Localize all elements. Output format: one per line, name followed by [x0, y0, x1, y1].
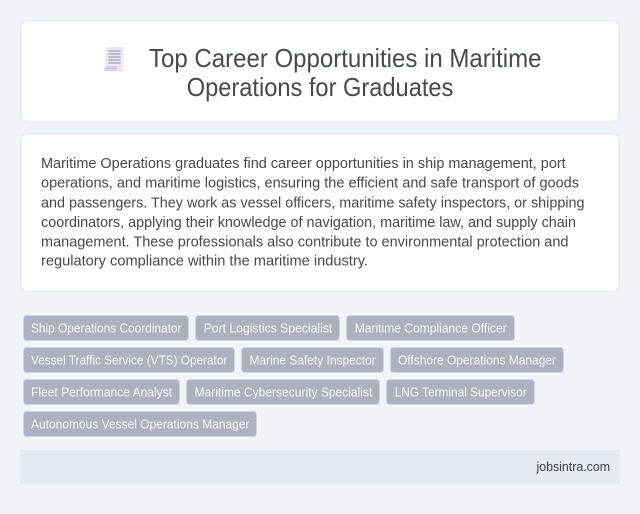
tag: Fleet Performance Analyst: [24, 380, 180, 404]
tag: Marine Safety Inspector: Marine Safety Inspector: [250, 352, 376, 368]
tag: LNG Terminal Supervisor: LNG Terminal Supervisor: [395, 384, 527, 400]
tag: Autonomous Vessel Operations Manager: [24, 412, 256, 436]
description text: management. These professionals also contribute to environmental protection and: [41, 233, 568, 250]
tag: Ship Operations Coordinator: [24, 316, 188, 340]
tag: Autonomous Vessel Operations Manager: Autonomous Vessel Operations Manager: [31, 416, 250, 432]
tag: Vessel Traffic Service (VTS) Operator: [24, 348, 234, 372]
tag: Offshore Operations Manager: Offshore Operations Manager: [398, 352, 557, 368]
icon: document scroll: [104, 47, 124, 71]
title: [149, 43, 542, 102]
description text: [41, 155, 584, 270]
tag: Maritime Cybersecurity Specialist: Maritime Cybersecurity Specialist: [194, 384, 373, 400]
description text: Maritime Operations graduates find career opportunities in ship management, port: [41, 155, 567, 172]
tag: Maritime Compliance Officer: Maritime Compliance Officer: [355, 320, 507, 336]
title: Top Career Opportunities in Maritime: [149, 43, 542, 73]
description text: coordinators, applying their knowledge of navigation, maritime law, and supply chain: [41, 214, 576, 231]
tag: Fleet Performance Analyst: Fleet Performance Analyst: [31, 384, 172, 400]
footer: jobsintra.com: [536, 460, 610, 474]
description text: and passengers. They work as vessel officers, maritime safety inspectors, or shipping: [41, 194, 584, 211]
panel: header: [20, 20, 620, 122]
tag: Port Logistics Specialist: [196, 316, 340, 340]
tag: Ship Operations Coordinator: Ship Operations Coordinator: [31, 320, 182, 336]
title: Operations for Graduates: [187, 72, 453, 102]
tag: Maritime Cybersecurity Specialist: [186, 380, 380, 404]
panel: description: [20, 134, 620, 292]
tag: Vessel Traffic Service (VTS) Operator: Vessel Traffic Service (VTS) Operator: [31, 352, 228, 368]
footer: [20, 450, 620, 484]
description text: regulatory compliance within the maritime industry.: [41, 252, 368, 270]
description text: operations, and maritime logistics, ensuring the efficient and safe transport of goods: [41, 175, 579, 192]
tag: LNG Terminal Supervisor: [386, 380, 534, 404]
tag: Marine Safety Inspector: [242, 348, 384, 372]
tag: Offshore Operations Manager: [390, 348, 564, 372]
tag: Port Logistics Specialist: Port Logistics Specialist: [204, 320, 333, 336]
tag: Maritime Compliance Officer: [346, 316, 514, 340]
